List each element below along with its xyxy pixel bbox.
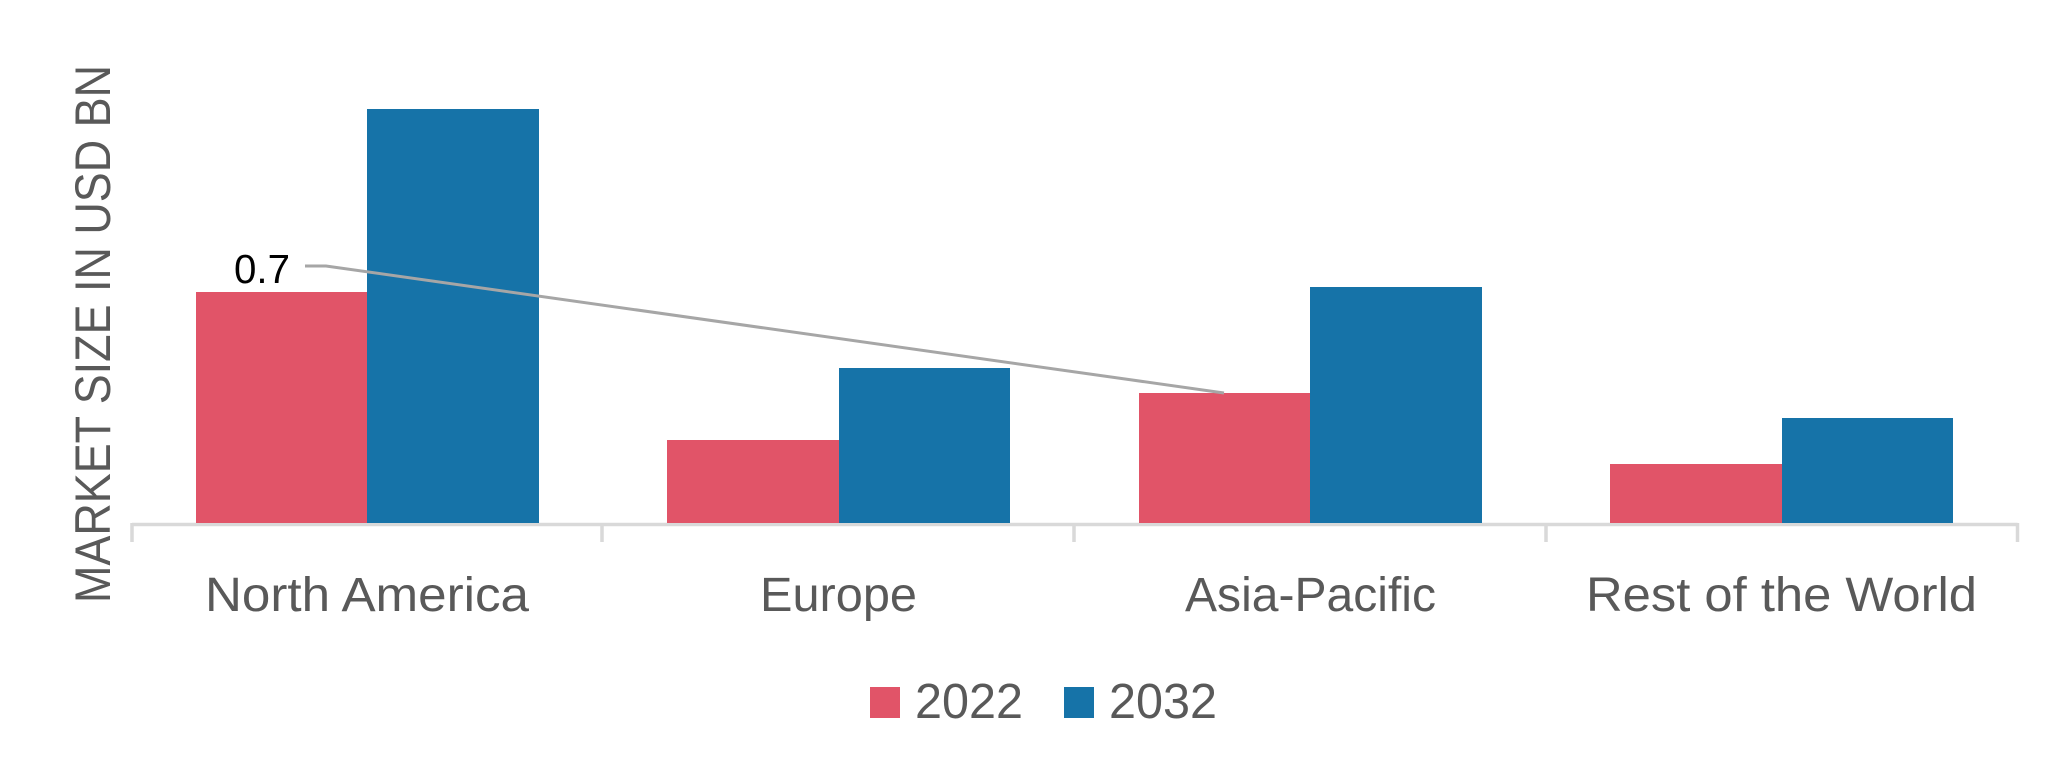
x axis [132, 523, 2018, 542]
bars: North America [196, 109, 539, 523]
category label: North America: North America [205, 569, 529, 622]
legend item: 2022: 2022 [915, 675, 1023, 729]
legend [870, 675, 1217, 729]
y axis title: MARKET SIZE IN USD BN [65, 65, 121, 603]
category label: Europe: Europe [760, 569, 917, 622]
bars: Asia-Pacific [1139, 287, 1482, 523]
legend item: 2032: 2032 [1109, 675, 1217, 729]
category label: Asia-Pacific: Asia-Pacific [1185, 569, 1436, 622]
leader line for data label [305, 266, 1224, 393]
data label 0.7: 0.7 [234, 246, 290, 292]
bar chart [132, 109, 2018, 542]
bars: Rest of the World [1610, 418, 1953, 523]
bars: Europe [667, 368, 1010, 523]
category label: Rest of the World: Rest of the World [1586, 569, 1977, 622]
